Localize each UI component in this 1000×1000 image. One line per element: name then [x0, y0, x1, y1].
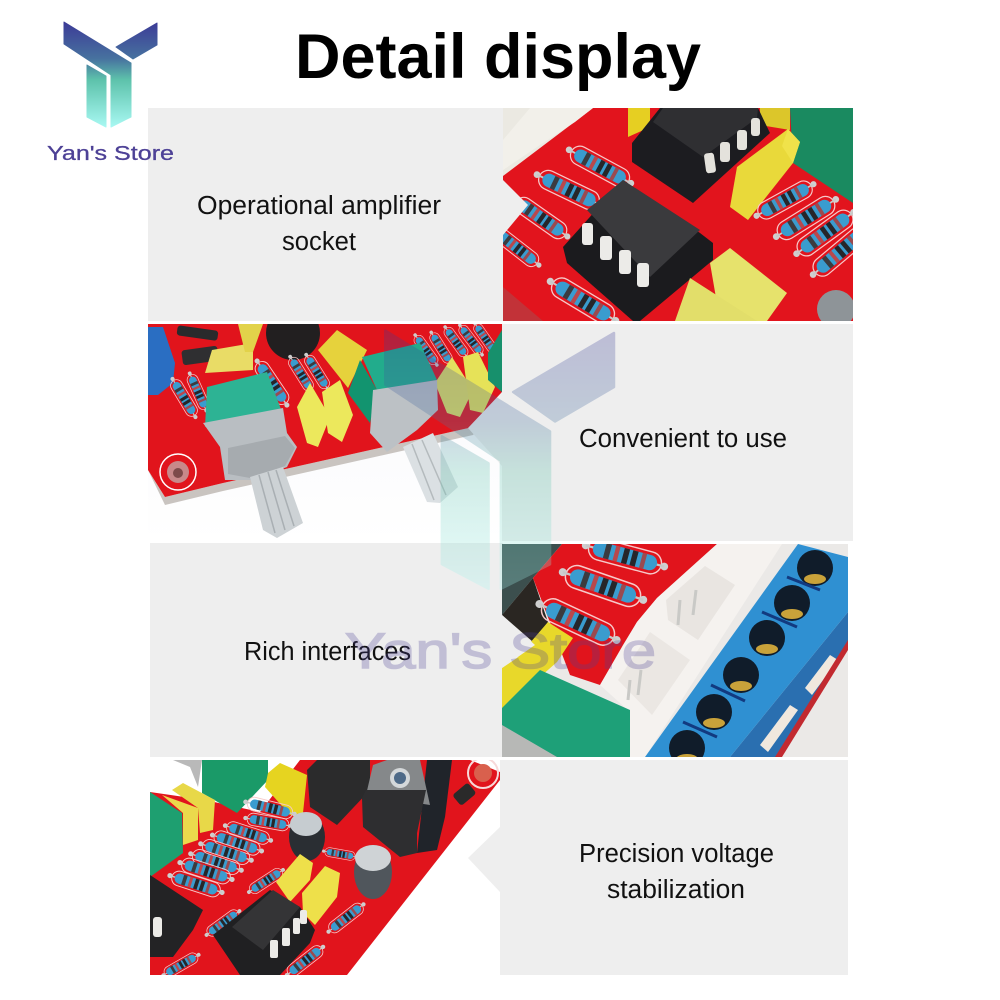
watermark: Yan's Store logo: [345, 331, 656, 679]
text: precision voltage stabilization: stabilization: [607, 876, 745, 904]
panel: operational amplifier socket label: [148, 108, 503, 321]
title: Detail display: [295, 22, 701, 92]
icon: watermark mark: [385, 331, 614, 589]
text: operational amplifier socket: Operational amplifier: [197, 192, 442, 220]
text: operational amplifier socket: socket: [282, 228, 356, 256]
watermark wordmark: Yan's Store: [345, 623, 656, 679]
text: precision voltage stabilization: Precision voltage: [579, 840, 774, 868]
arrow notch: photo 1 pointer: [503, 180, 528, 235]
arrow notch: photo 3 pointer: [502, 615, 535, 668]
photo: op-amp sockets on red board: [503, 108, 853, 321]
logo wordmark: Yan's Store: [47, 143, 174, 165]
panel: precision voltage stabilization label: [468, 760, 848, 975]
photo: voltage regulators on red board: [150, 758, 500, 981]
text: rich interfaces: Rich interfaces: [244, 638, 411, 666]
text: convenient to use: Convenient to use: [579, 425, 787, 453]
photo: connectors and terminal block: [502, 534, 848, 766]
photo: potentiometers on red board: [148, 306, 502, 541]
icon: logo mark: [64, 22, 157, 127]
panel: rich interfaces label: [150, 543, 503, 757]
logo: Yan's Store: [47, 22, 174, 165]
panel: convenient to use label: [502, 324, 853, 541]
arrow notch: photo 2 pointer: [468, 392, 502, 466]
